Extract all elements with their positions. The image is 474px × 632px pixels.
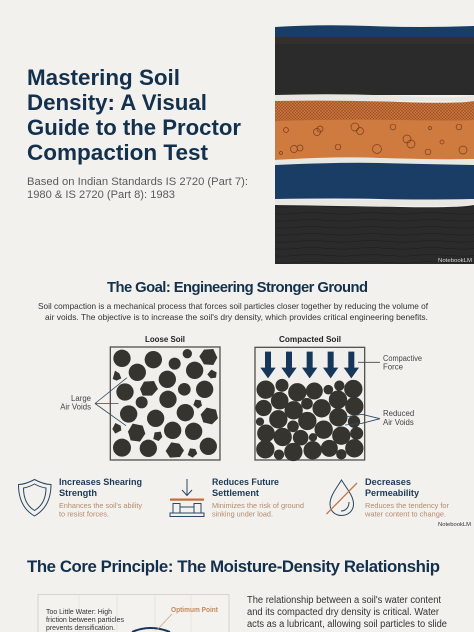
credit: section: NotebookLM	[438, 522, 471, 528]
heading: the goal: The Goal: Engineering Stronger Ground	[107, 280, 368, 296]
callout: reduced air voids	[345, 409, 414, 427]
subtitle: Based on Indian Standards IS 2720 (Part 7):	[27, 176, 248, 188]
goal description	[38, 301, 429, 322]
callout: large air voids: Air Voids	[60, 402, 91, 412]
text: future settlement: Settlement	[212, 487, 259, 498]
annotation: too little water: prevents densification.	[46, 623, 115, 632]
benefit: shearing strength	[18, 476, 142, 518]
callout: large air voids	[60, 378, 127, 426]
annotation: too little water: friction between particles	[46, 615, 124, 624]
text: shearing strength: to resist forces.	[59, 510, 109, 518]
callout: compactive force	[358, 354, 422, 372]
icon: crossed water drop	[326, 480, 357, 516]
callout: reduced air voids: Reduced	[383, 409, 414, 418]
callout: compactive force: Compactive	[383, 354, 422, 363]
heading: the core principle: The Core Principle: The Moisture-Density Relationship	[27, 557, 440, 576]
text: permeability	[364, 476, 450, 518]
text: shearing strength: Strength	[59, 487, 97, 498]
benefit: permeability	[326, 476, 450, 518]
text: permeability: water content to change.	[364, 510, 446, 518]
label: loose soil: Loose Soil	[145, 335, 185, 344]
goal description: air voids. The objective is to increase the soil's dry density, which provides critical engineering benefits.	[45, 312, 428, 322]
text: future settlement	[212, 476, 304, 518]
illustration: soil layers	[275, 25, 474, 265]
diagram: loose soil particles	[110, 347, 220, 460]
annotation: too little water: Too Little Water: High	[46, 607, 112, 616]
text: permeability: Reduces the tendency for	[365, 501, 450, 510]
subtitle: 1980 & IS 2720 (Part 8): 1983	[27, 189, 175, 201]
annotation: too little water	[46, 607, 124, 632]
text: permeability: Permeability	[365, 487, 420, 498]
title: Compaction Test	[27, 140, 209, 165]
title	[27, 65, 241, 165]
callout: compactive force: Force	[383, 362, 403, 372]
callout: large air voids: Large	[71, 394, 91, 403]
callout: reduced air voids: Air Voids	[383, 418, 414, 427]
text: shearing strength: Enhances the soil's ability	[59, 501, 142, 510]
panel: loose soil	[110, 335, 220, 460]
chart: moisture-density curve	[38, 594, 229, 632]
text: relationship explanation: The relationship between a soil's water content	[247, 595, 441, 606]
annotation: optimum point: Optimum Point	[171, 605, 219, 614]
text: future settlement: sinking under load.	[212, 510, 273, 518]
panel: compacted soil	[255, 335, 365, 461]
text: relationship explanation	[247, 595, 448, 630]
goal description: Soil compaction is a mechanical process that forces soil particles closer together by reducing the volume of	[38, 301, 429, 311]
icon: settlement foundation	[170, 479, 204, 516]
label: compacted soil: Compacted Soil	[279, 335, 341, 344]
title: Density: A Visual	[27, 90, 207, 115]
text: relationship explanation: acts as a lubricant, allowing soil particles to slide	[247, 619, 448, 630]
text: permeability: Decreases	[365, 476, 411, 487]
text: shearing strength	[59, 476, 142, 518]
credit: image: NotebookLM	[438, 258, 472, 264]
diagram: compacted soil particles	[255, 347, 365, 461]
text: future settlement: Minimizes the risk of ground	[212, 501, 304, 510]
benefit: future settlement	[170, 476, 304, 518]
text: relationship explanation: and its compacted dry density is critical. Water	[247, 607, 440, 618]
text: future settlement: Reduces Future	[212, 476, 279, 487]
title: Mastering Soil	[27, 65, 180, 90]
icon: shield	[18, 480, 51, 516]
title: Guide to the Proctor	[27, 115, 241, 140]
subtitle	[27, 176, 248, 201]
text: shearing strength: Increases Shearing	[59, 476, 142, 487]
